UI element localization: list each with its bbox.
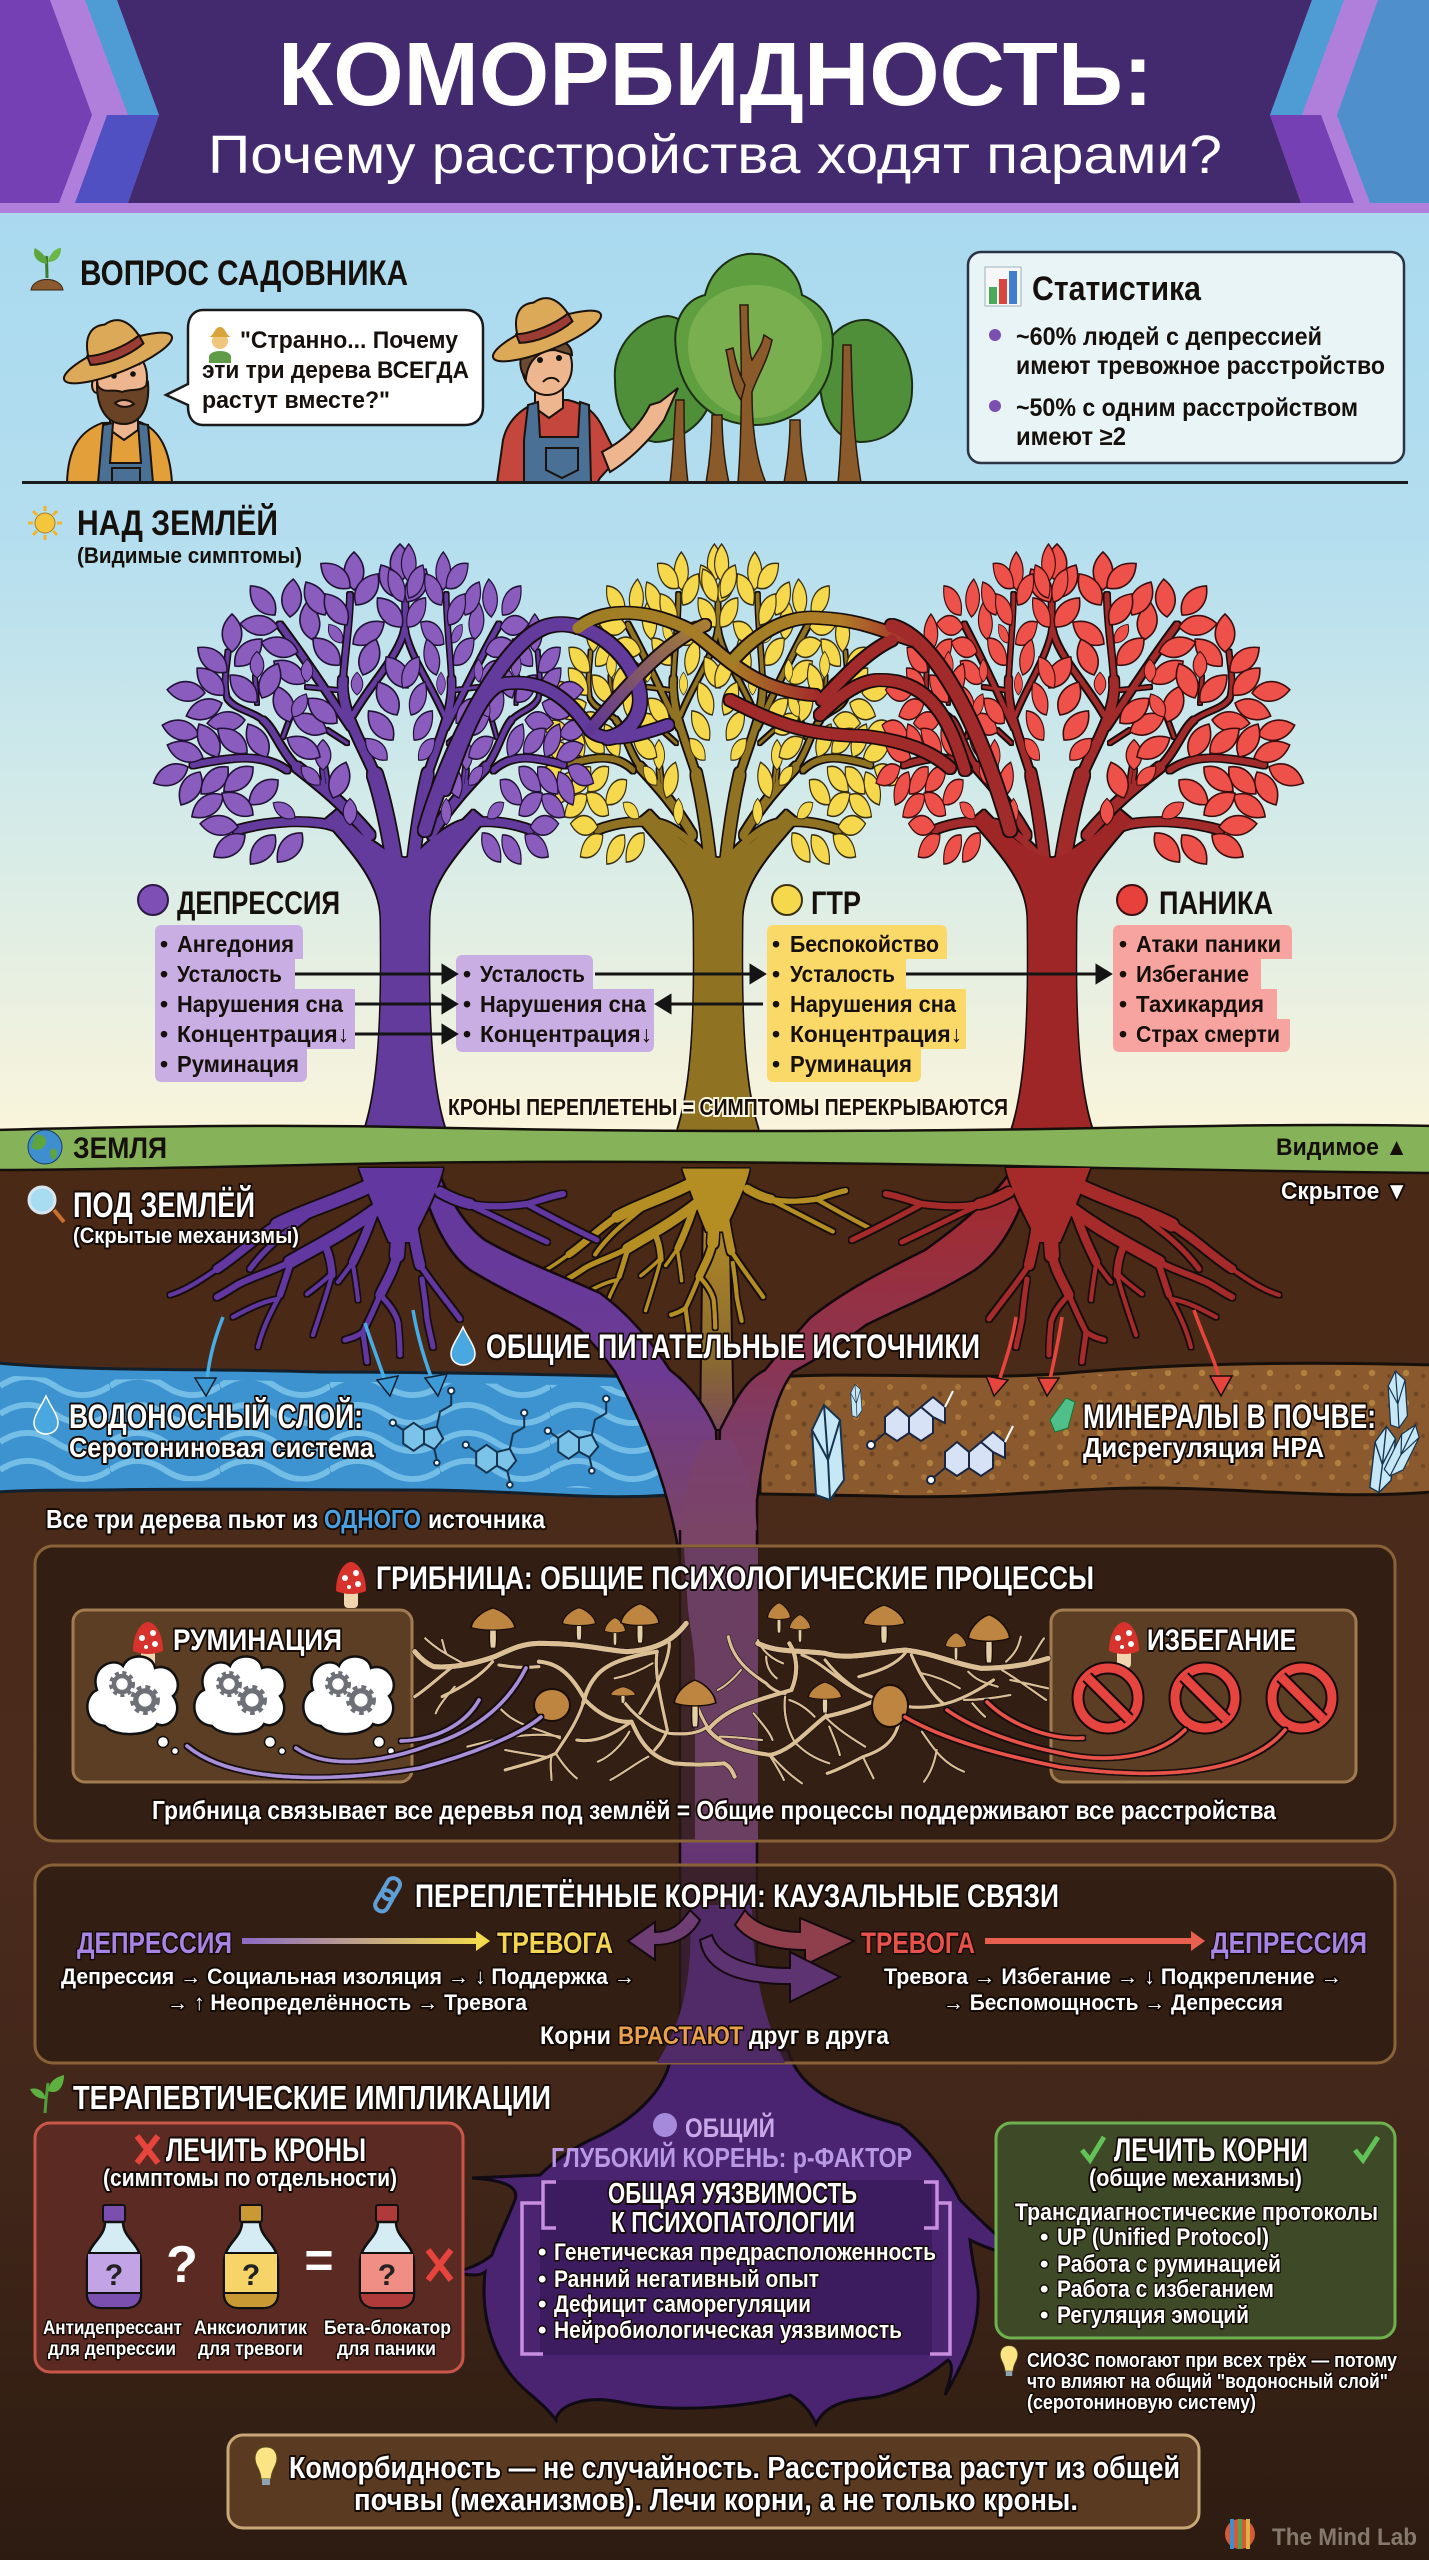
bottle labels: для тревоги <box>198 2339 303 2360</box>
panel: statistics <box>968 252 1404 463</box>
caption: roots grow together <box>540 2022 890 2050</box>
bubble text: эти три дерева ВСЕГДА <box>202 357 469 384</box>
protocol list: Регуляция эмоций <box>1057 2302 1249 2329</box>
heading: treat roots: ЛЕЧИТЬ КОРНИ <box>1114 2132 1308 2168</box>
subtitle: symptoms separately: (симптомы по отдельности) <box>103 2165 397 2192</box>
vulnerability list: • <box>538 2291 546 2318</box>
logo: The Mind Lab <box>1225 2519 1417 2551</box>
subtitle: shared mechanisms: (общие механизмы) <box>1089 2165 1302 2192</box>
heading: intertwined roots: ПЕРЕПЛЕТЁННЫЕ КОРНИ: КАУЗАЛЬНЫЕ СВЯЗИ <box>415 1878 1059 1914</box>
small tree group <box>615 254 912 483</box>
speech bubble <box>166 310 483 425</box>
causal chain right: ТРЕВОГА <box>861 1927 975 1960</box>
legend: shared symptoms list <box>456 955 654 1052</box>
icon: globe <box>28 1130 62 1164</box>
icons: green checks <box>1082 2137 1378 2160</box>
legend: GAD list: Усталость <box>790 961 895 987</box>
protocol list: • <box>1040 2302 1048 2329</box>
minerals label: Дисрегуляция НРА <box>1083 1432 1324 1463</box>
legend: depression list: Концентрация↓ <box>177 1021 349 1047</box>
legend: GAD list: • <box>772 1021 780 1047</box>
vulnerability list: Генетическая предрасположенность <box>554 2239 936 2266</box>
stats bullets <box>989 323 1385 451</box>
roots: red <box>852 1168 1279 1362</box>
vulnerability list: Дефицит саморегуляции <box>554 2291 811 2318</box>
ground strip <box>0 1125 1429 1173</box>
legend: GAD list <box>767 885 966 1082</box>
label: visible: Видимое ▲ <box>1276 1134 1408 1161</box>
steroid molecules <box>867 1391 1013 1484</box>
text: same source: источника <box>428 1504 545 1534</box>
heading: below ground: ПОД ЗЕМЛЁЙ <box>73 1185 255 1225</box>
icon: bulb <box>255 2447 277 2485</box>
curves: rumination links <box>187 1668 541 1777</box>
stats bullets: ~60% людей с депрессией <box>1016 323 1322 351</box>
label: earth: ЗЕМЛЯ <box>73 1132 167 1165</box>
icon: green crystal <box>1050 1398 1075 1432</box>
legend: depression list <box>138 885 355 1082</box>
bubble text <box>202 327 469 414</box>
bottle labels: Антидепрессант <box>43 2318 182 2339</box>
legend: depression list: Руминация <box>177 1051 299 1077</box>
conclusion text <box>289 2450 1180 2517</box>
curves: avoidance links <box>905 1702 1285 1773</box>
subtitle: Почему расстройства ходят парами? <box>208 125 1222 185</box>
sub-panel: rumination <box>73 1610 412 1782</box>
legend: depression list: Усталость <box>177 961 282 987</box>
brackets <box>522 2182 950 2354</box>
heading: mycelium: ГРИБНИЦА: ОБЩИЕ ПСИХОЛОГИЧЕСКИЕ ПРОЦЕССЫ <box>376 1560 1094 1596</box>
heading: treat crowns: ЛЕЧИТЬ КРОНЫ <box>166 2132 366 2168</box>
legend: GAD list: • <box>772 931 780 957</box>
causal chain left: Депрессия → Социальная изоляция → ↓ Поддержка → <box>61 1964 635 1989</box>
tip text <box>1027 2350 1398 2414</box>
vulnerability heading: К ПСИХОПАТОЛОГИИ <box>611 2207 855 2239</box>
icon: mushroom <box>336 1562 366 1608</box>
gardener right <box>479 280 678 483</box>
gardener left <box>50 302 177 483</box>
trunk through mycelium panel <box>684 1548 758 1840</box>
aquifer label: Серотониновая система <box>69 1432 374 1463</box>
text: same source: Все три дерева пьют из <box>46 1504 318 1534</box>
icon: bar chart <box>985 267 1021 306</box>
deep root: p-factor shape <box>455 2050 1027 2424</box>
causal chain right: → Беспомощность → Депрессия <box>943 1990 1283 2015</box>
heading: below ground <box>73 1185 299 1248</box>
protocol list: UP (Unified Protocol) <box>1057 2224 1269 2251</box>
stats bullets: ~50% с одним расстройством <box>1016 394 1358 422</box>
legend: depression list: • <box>160 931 168 957</box>
purple taproot <box>420 1175 720 1560</box>
causal chain left <box>61 1927 635 2015</box>
legend: panic list: Атаки паники <box>1136 931 1281 957</box>
caption: roots grow together: ВРАСТАЮТ <box>618 2022 743 2050</box>
icon: sun <box>28 506 62 540</box>
legend: shared symptoms list: • <box>463 961 471 987</box>
icon: sprout <box>31 248 63 290</box>
legend: panic list: ПАНИКА <box>1159 885 1273 921</box>
bottles <box>87 2205 451 2308</box>
legend: depression list: • <box>160 961 168 987</box>
legend: panic list: • <box>1119 931 1127 957</box>
protocol list: • <box>1040 2224 1048 2251</box>
intertwined crown branches <box>425 613 1010 830</box>
stats bullets: имеют тревожное расстройство <box>1016 352 1385 380</box>
conclusion text: почвы (механизмов). Лечи корни, а не только кроны. <box>354 2482 1078 2517</box>
stats bullets: имеют ≥2 <box>1016 423 1126 451</box>
legend: depression list: ДЕПРЕССИЯ <box>177 885 340 921</box>
caption: roots grow together: Корни <box>540 2022 611 2050</box>
legend: GAD list: Беспокойство <box>790 931 939 957</box>
causal chain right: ДЕПРЕССИЯ <box>1211 1927 1367 1960</box>
trunk through panel <box>657 1905 785 2063</box>
vulnerability heading <box>608 2178 857 2239</box>
protocol list: Трансдиагностические протоколы <box>1015 2199 1378 2226</box>
legend: shared symptoms list: • <box>463 991 471 1017</box>
icon: tip bulb <box>1000 2346 1018 2376</box>
mycelium network <box>415 1623 1048 1783</box>
causal chain right <box>861 1927 1367 2015</box>
legend: GAD list: • <box>772 991 780 1017</box>
heading: above ground <box>77 503 302 568</box>
roots: yellow <box>531 1169 873 1334</box>
legend: panic list: • <box>1119 961 1127 987</box>
sub-panel: avoidance: ИЗБЕГАНИЕ <box>1147 1624 1296 1657</box>
bottle labels: Анксиолитик <box>194 2318 307 2339</box>
legend: depression list: Нарушения сна <box>177 991 343 1017</box>
background: sky <box>0 200 1429 1160</box>
mushrooms <box>471 1603 1010 1727</box>
icon: chain <box>373 1876 402 1914</box>
arrows: causal curves <box>628 1910 854 2002</box>
heading: above ground: НАД ЗЕМЛЁЙ <box>77 503 278 543</box>
heading: therapy implications: ТЕРАПЕВТИЧЕСКИЕ ИМПЛИКАЦИИ <box>73 2079 551 2116</box>
protocol list: Работа с руминацией <box>1057 2251 1281 2278</box>
icon: gardener emoji <box>208 327 232 363</box>
bottles: = <box>304 2232 334 2288</box>
protocol list: Работа с избеганием <box>1057 2276 1274 2303</box>
arrows: mineral draw <box>986 1310 1232 1396</box>
title: КОМОРБИДНОСТЬ: <box>278 25 1153 125</box>
aquifer layer <box>0 1363 680 1497</box>
callout: conclusion <box>228 2435 1199 2528</box>
legend: panic list: • <box>1119 1021 1127 1047</box>
aquifer label: ВОДОНОСНЫЙ СЛОЙ: <box>69 1397 363 1436</box>
header banner <box>0 0 1429 213</box>
legend: shared symptoms list: • <box>463 1021 471 1047</box>
vulnerability list <box>538 2239 936 2344</box>
bottles: ? <box>166 2236 198 2294</box>
legend: GAD list: ГТР <box>811 885 861 921</box>
red taproot <box>715 1175 1030 1560</box>
heading: below ground: (Скрытые механизмы) <box>73 1223 299 1248</box>
bottle labels: для паники <box>337 2339 436 2360</box>
icon: drop <box>451 1327 475 1365</box>
logo: The Mind Lab: The Mind Lab <box>1272 2524 1417 2551</box>
panel: mycelium <box>35 1546 1395 1841</box>
tree: red panic <box>873 544 1308 1130</box>
ground line <box>22 481 1408 484</box>
protocol list: • <box>1040 2276 1048 2303</box>
panel: treat crowns <box>35 2123 463 2372</box>
legend: shared symptoms list: Нарушения сна <box>480 991 646 1017</box>
legend: panic list: • <box>1119 991 1127 1017</box>
tree: purple depression <box>149 544 597 1130</box>
vulnerability list: • <box>538 2239 546 2266</box>
conclusion text: Коморбидность — не случайность. Расстройства растут из общей <box>289 2450 1180 2485</box>
legend: GAD list: Руминация <box>790 1051 912 1077</box>
legend: shared symptoms list: Концентрация↓ <box>480 1021 652 1047</box>
minerals label <box>1083 1398 1376 1463</box>
central trunk <box>680 1440 757 2070</box>
heading: gardener question: ВОПРОС САДОВНИКА <box>80 254 408 293</box>
legend: GAD list: • <box>772 1051 780 1077</box>
panel: causal links <box>35 1865 1395 2063</box>
legend: shared symptoms list: Усталость <box>480 961 585 987</box>
legend: GAD list: • <box>772 961 780 987</box>
bottle labels: для депрессии <box>48 2339 176 2360</box>
legend: panic list: Страх смерти <box>1136 1021 1280 1047</box>
vulnerability list: Нейробиологическая уязвимость <box>554 2317 902 2344</box>
arrows: water draw <box>195 1310 447 1396</box>
legend: depression list: Ангедония <box>177 931 294 957</box>
caption: crowns intertwined: КРОНЫ ПЕРЕПЛЕТЕНЫ = СИМПТОМЫ ПЕРЕКРЫВАЮТСЯ <box>448 1094 1008 1120</box>
icon: magnifier <box>29 1187 64 1222</box>
label: hidden: Скрытое ▼ <box>1281 1178 1408 1205</box>
panel: p-factor <box>522 2112 950 2355</box>
text: same source <box>46 1504 545 1534</box>
arrows: symptom overlaps <box>295 966 1110 1042</box>
bubble text: растут вместе?" <box>202 387 390 414</box>
legend: panic list: Тахикардия <box>1136 991 1264 1017</box>
soil minerals layer <box>760 1363 1429 1497</box>
legend: GAD list: Концентрация↓ <box>790 1021 962 1047</box>
crystals <box>812 1371 1426 1500</box>
serotonin molecules <box>390 1388 609 1488</box>
legend: GAD list: Нарушения сна <box>790 991 956 1017</box>
causal chain left: ТРЕВОГА <box>497 1927 613 1960</box>
text: same source: ОДНОГО <box>324 1504 421 1534</box>
sub-panel: avoidance <box>1051 1610 1356 1782</box>
vulnerability heading: ОБЩАЯ УЯЗВИМОСТЬ <box>608 2178 857 2210</box>
sub-panel: rumination: РУМИНАЦИЯ <box>173 1624 342 1657</box>
protocol list: • <box>1040 2251 1048 2278</box>
bottle labels: Бета-блокатор <box>324 2318 451 2339</box>
legend: panic list <box>1113 885 1292 1052</box>
caption: mycelium: Грибница связывает все деревья под землёй = Общие процессы поддерживают все расстройства <box>152 1795 1276 1825</box>
heading: shared nutrient sources: ОБЩИЕ ПИТАТЕЛЬНЫЕ ИСТОЧНИКИ <box>486 1328 980 1366</box>
bottle labels <box>43 2318 451 2360</box>
icon: seedling <box>30 2075 64 2113</box>
caption: roots grow together: друг в друга <box>749 2022 890 2050</box>
background: soil <box>0 1150 1429 2560</box>
causal chain right: Тревога → Избегание → ↓ Подкрепление → <box>884 1964 1342 1989</box>
protocol list <box>1015 2199 1378 2329</box>
heading: common: ОБЩИЙ <box>685 2112 775 2143</box>
vulnerability list: Ранний негативный опыт <box>554 2266 819 2293</box>
panel: treat roots <box>996 2123 1395 2338</box>
aquifer label <box>69 1397 374 1463</box>
vulnerability list: • <box>538 2317 546 2344</box>
vulnerability list: • <box>538 2266 546 2293</box>
legend: depression list: • <box>160 1051 168 1077</box>
roots: purple <box>170 1168 597 1362</box>
central yellow taproot <box>700 1200 734 1430</box>
stats heading: Статистика <box>1032 270 1202 308</box>
icon: lilac circle <box>653 2113 677 2137</box>
heading: deep root: ГЛУБОКИЙ КОРЕНЬ: p-ФАКТОР <box>551 2141 912 2173</box>
bubble text: "Странно... Почему <box>240 327 459 354</box>
legend: depression list: • <box>160 1021 168 1047</box>
tree: yellow GAD <box>534 544 902 1130</box>
legend: depression list: • <box>160 991 168 1017</box>
causal chain left: → ↑ Неопределённость → Тревога <box>167 1990 528 2015</box>
icon: red x <box>137 2136 158 2163</box>
legend: panic list: Избегание <box>1136 961 1249 987</box>
heading: above ground: (Видимые симптомы) <box>77 543 302 568</box>
causal chain left: ДЕПРЕССИЯ <box>77 1927 232 1960</box>
icon: drop small <box>34 1396 58 1434</box>
tip text: (серотониновую систему) <box>1027 2392 1256 2414</box>
